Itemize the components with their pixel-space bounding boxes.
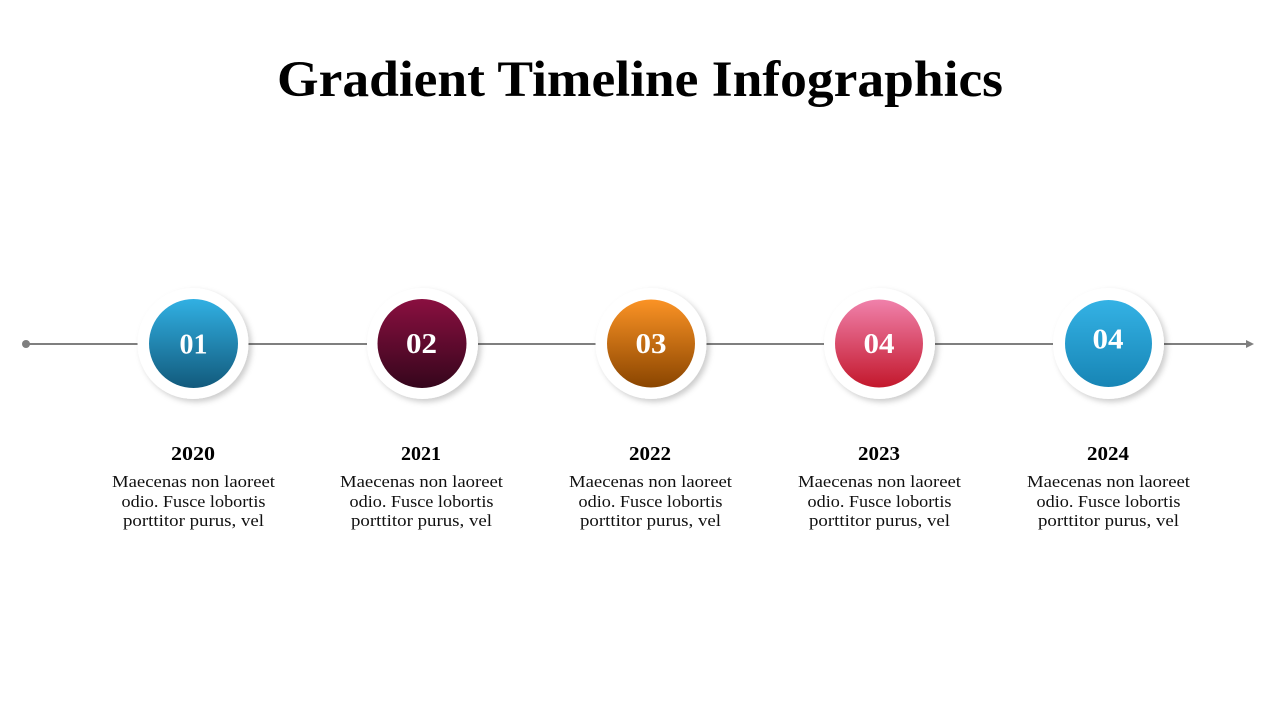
description 2023 (798, 472, 961, 530)
milestone 2022 (569, 288, 732, 530)
badge 01: 01 (180, 328, 208, 360)
badge 01 (138, 288, 248, 399)
description 2021: porttitor purus, vel (351, 511, 492, 530)
description 2023: odio. Fusce lobortis (808, 492, 952, 511)
year 2021: 2021 (401, 443, 441, 465)
description 2022: Maecenas non laoreet (569, 472, 732, 491)
badge 02: 02 (406, 328, 437, 360)
description 2024: porttitor purus, vel (1038, 511, 1179, 530)
year 2020: 2020 (171, 443, 215, 465)
badge 04: 04 (864, 328, 894, 360)
description 2020: Maecenas non laoreet (112, 472, 275, 491)
year 2024: 2024 (1087, 443, 1129, 465)
milestone 2023 (798, 288, 961, 530)
description 2023: Maecenas non laoreet (798, 472, 961, 491)
description 2023: porttitor purus, vel (809, 511, 950, 530)
badge 03: 03 (636, 328, 666, 360)
description 2022: odio. Fusce lobortis (578, 492, 722, 511)
badge 04 (fifth) (1053, 288, 1164, 399)
timeline line with start dot and end arrow (22, 340, 1254, 348)
description 2020 (112, 472, 275, 530)
badge 04 (fifth): 04 (1092, 324, 1124, 356)
description 2021: odio. Fusce lobortis (350, 492, 494, 511)
milestone 2021 (340, 288, 503, 530)
description 2024: Maecenas non laoreet (1027, 472, 1190, 491)
year 2023: 2023 (858, 443, 900, 465)
milestone 2024 (1027, 288, 1190, 530)
description 2020: odio. Fusce lobortis (122, 492, 266, 511)
title: Gradient Timeline Infographics (277, 52, 1003, 108)
description 2020: porttitor purus, vel (123, 511, 264, 530)
badge 03 (596, 288, 706, 399)
description 2022 (569, 472, 732, 530)
description 2024: odio. Fusce lobortis (1036, 492, 1180, 511)
description 2021: Maecenas non laoreet (340, 472, 503, 491)
year 2022: 2022 (629, 443, 671, 465)
description 2022: porttitor purus, vel (580, 511, 721, 530)
description 2024 (1027, 472, 1190, 530)
milestone 2020 (112, 288, 275, 530)
badge 04 (824, 288, 935, 399)
badge 02 (367, 288, 478, 399)
description 2021 (340, 472, 503, 530)
